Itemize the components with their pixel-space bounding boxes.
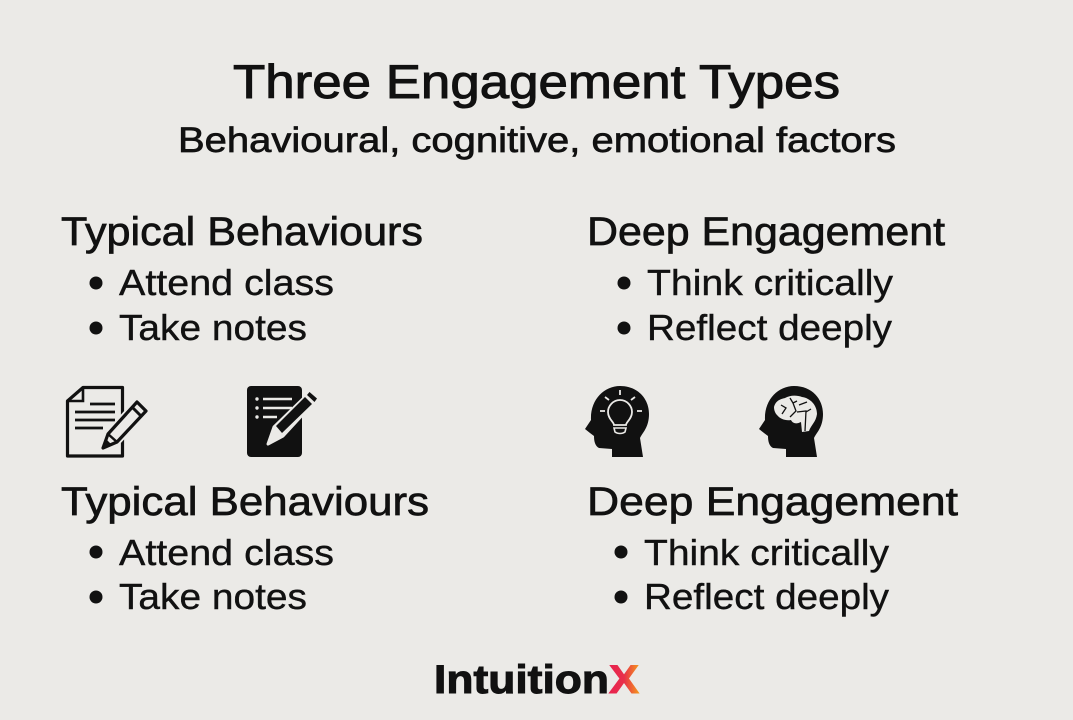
icon: black notepad with pencil	[247, 386, 318, 457]
subtitle: Behavioural, cognitive, emotional factors	[178, 121, 896, 160]
bullet list: Reflect deeply	[644, 576, 889, 617]
panel: typical behaviours upper	[61, 210, 423, 348]
bullet list: Reflect deeply	[647, 307, 892, 348]
bullet list	[614, 532, 889, 617]
heading: deep engagement: Deep Engagement	[587, 210, 945, 254]
logo: IntuitionX: X	[609, 658, 639, 702]
bullet list	[618, 262, 893, 348]
icon: head with brain	[759, 386, 823, 457]
logo: IntuitionX: Intuition	[434, 658, 609, 702]
panel: deep engagement upper	[587, 210, 945, 348]
panel: deep engagement lower	[587, 480, 958, 617]
heading: deep engagement: Deep Engagement	[587, 480, 958, 524]
icon: document with pencil	[68, 388, 146, 456]
heading: typical behaviours: Typical Behaviours	[61, 480, 429, 524]
bullet list	[90, 532, 334, 617]
icon: head with lightbulb	[585, 386, 649, 457]
heading: typical behaviours: Typical Behaviours	[61, 210, 423, 254]
bullet list: Take notes	[119, 307, 307, 348]
bullet list: Take notes	[119, 576, 307, 617]
title: Three Engagement Types	[233, 55, 840, 108]
bullet list: Think critically	[644, 532, 889, 573]
bullet list: Attend class	[119, 262, 334, 303]
bullet list: Attend class	[119, 532, 334, 573]
bullet list	[90, 262, 334, 348]
bullet list: Think critically	[647, 262, 893, 303]
panel: typical behaviours lower	[61, 480, 429, 617]
